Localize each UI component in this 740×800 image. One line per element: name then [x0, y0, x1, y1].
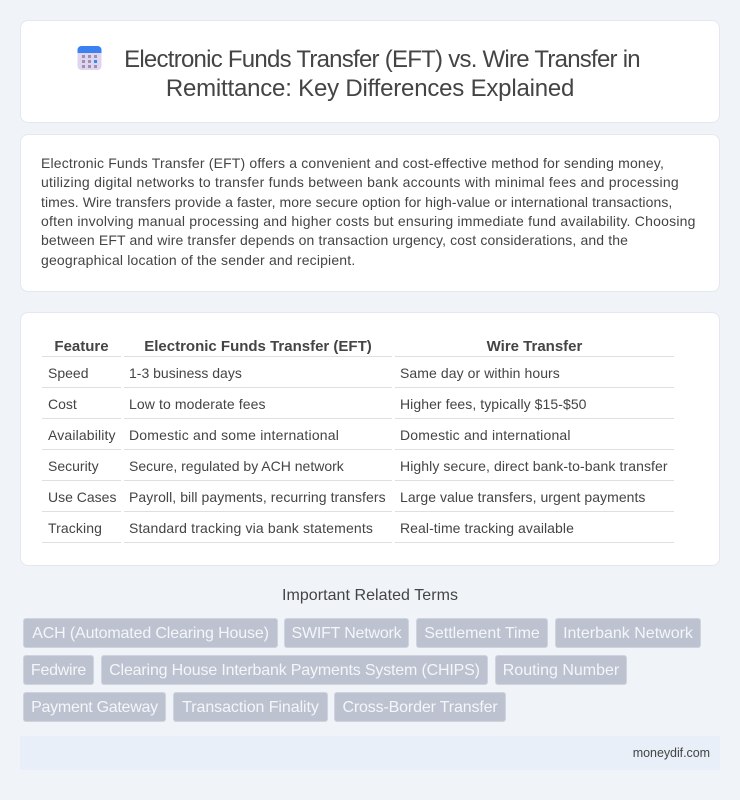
- row: use cases: Payroll, bill payments, recurring transfers: [129, 489, 386, 505]
- tag: Routing Number: [503, 662, 619, 679]
- tag: Interbank Network: [563, 625, 693, 642]
- row: speed: [42, 365, 674, 388]
- row: security: Highly secure, direct bank-to-bank transfer: [400, 458, 668, 474]
- footer text: source: moneydif.com: [633, 746, 710, 760]
- title: [124, 46, 640, 102]
- text block: introduction: Electronic Funds Transfer (EFT) offers a convenient and cost-effective method for sending money,: [41, 155, 664, 171]
- related terms tags: [23, 618, 701, 722]
- text block: introduction: [41, 155, 696, 268]
- row: security: Security: [48, 458, 99, 474]
- row: tracking: [42, 520, 674, 543]
- row: security: [42, 458, 674, 481]
- table header row: Electronic Funds Transfer (EFT): [144, 338, 372, 355]
- tag: [284, 618, 409, 648]
- tag: [555, 618, 701, 648]
- tag: SWIFT Network: [291, 625, 402, 642]
- panel: title card: [20, 20, 720, 123]
- tag: Settlement Time: [424, 625, 540, 642]
- tag: Clearing House Interbank Payments System (CHIPS): [109, 662, 480, 679]
- footer bar: [20, 736, 720, 770]
- row: tracking: Tracking: [48, 520, 102, 536]
- table header row: Wire Transfer: [487, 338, 582, 355]
- row: availability: Domestic and international: [400, 427, 571, 443]
- row: tracking: Standard tracking via bank statements: [129, 520, 373, 536]
- text block: introduction: times. Wire transfers provide a faster, more secure option for high-value or international transactions,: [41, 194, 672, 210]
- comparison table: [42, 338, 674, 543]
- heading: important related terms: Important Related Terms: [282, 587, 458, 604]
- tag: [334, 692, 506, 722]
- title: Electronic Funds Transfer (EFT) vs. Wire Transfer in: [124, 46, 640, 73]
- panel: comparison table: [20, 312, 720, 566]
- text block: introduction: utilizing digital networks to transfer funds between bank accounts with minimal fees and processing: [41, 174, 679, 190]
- tag: Fedwire: [31, 662, 86, 679]
- tag: Transaction Finality: [182, 699, 319, 716]
- text block: introduction: often involving manual processing and higher costs but ensuring immediate fund availability. Choosing: [41, 213, 696, 229]
- icon: calendar: [78, 46, 102, 70]
- table header row: [42, 338, 674, 357]
- title: Remittance: Key Differences Explained: [166, 75, 574, 102]
- row: availability: Availability: [48, 427, 116, 443]
- tag: Payment Gateway: [31, 699, 158, 716]
- row: availability: Domestic and some international: [129, 427, 339, 443]
- row: use cases: Use Cases: [48, 489, 116, 505]
- tag: [416, 618, 548, 648]
- table header row: Feature: [54, 338, 109, 355]
- row: speed: 1-3 business days: [129, 365, 242, 381]
- text block: introduction: between EFT and wire transfer depends on transaction urgency, cost considerations, and the: [41, 232, 628, 248]
- row: use cases: Large value transfers, urgent payments: [400, 489, 645, 505]
- row: security: Secure, regulated by ACH network: [129, 458, 344, 474]
- panel: introduction: [20, 134, 720, 292]
- tag: [173, 692, 328, 722]
- tag: [23, 655, 94, 685]
- row: availability: [42, 427, 674, 450]
- tag: [23, 692, 166, 722]
- row: speed: Same day or within hours: [400, 365, 560, 381]
- row: use cases: [42, 489, 674, 512]
- tag: ACH (Automated Clearing House): [32, 625, 269, 642]
- row: cost: [42, 396, 674, 419]
- row: speed: Speed: [48, 365, 88, 381]
- tag: [23, 618, 278, 648]
- tag: [495, 655, 627, 685]
- row: tracking: Real-time tracking available: [400, 520, 574, 536]
- row: cost: Cost: [48, 396, 77, 412]
- tag: Cross-Border Transfer: [342, 699, 498, 716]
- row: cost: Higher fees, typically $15-$50: [400, 396, 587, 412]
- tag: [101, 655, 488, 685]
- text block: introduction: geographical location of the sender and recipient.: [41, 252, 355, 268]
- row: cost: Low to moderate fees: [129, 396, 266, 412]
